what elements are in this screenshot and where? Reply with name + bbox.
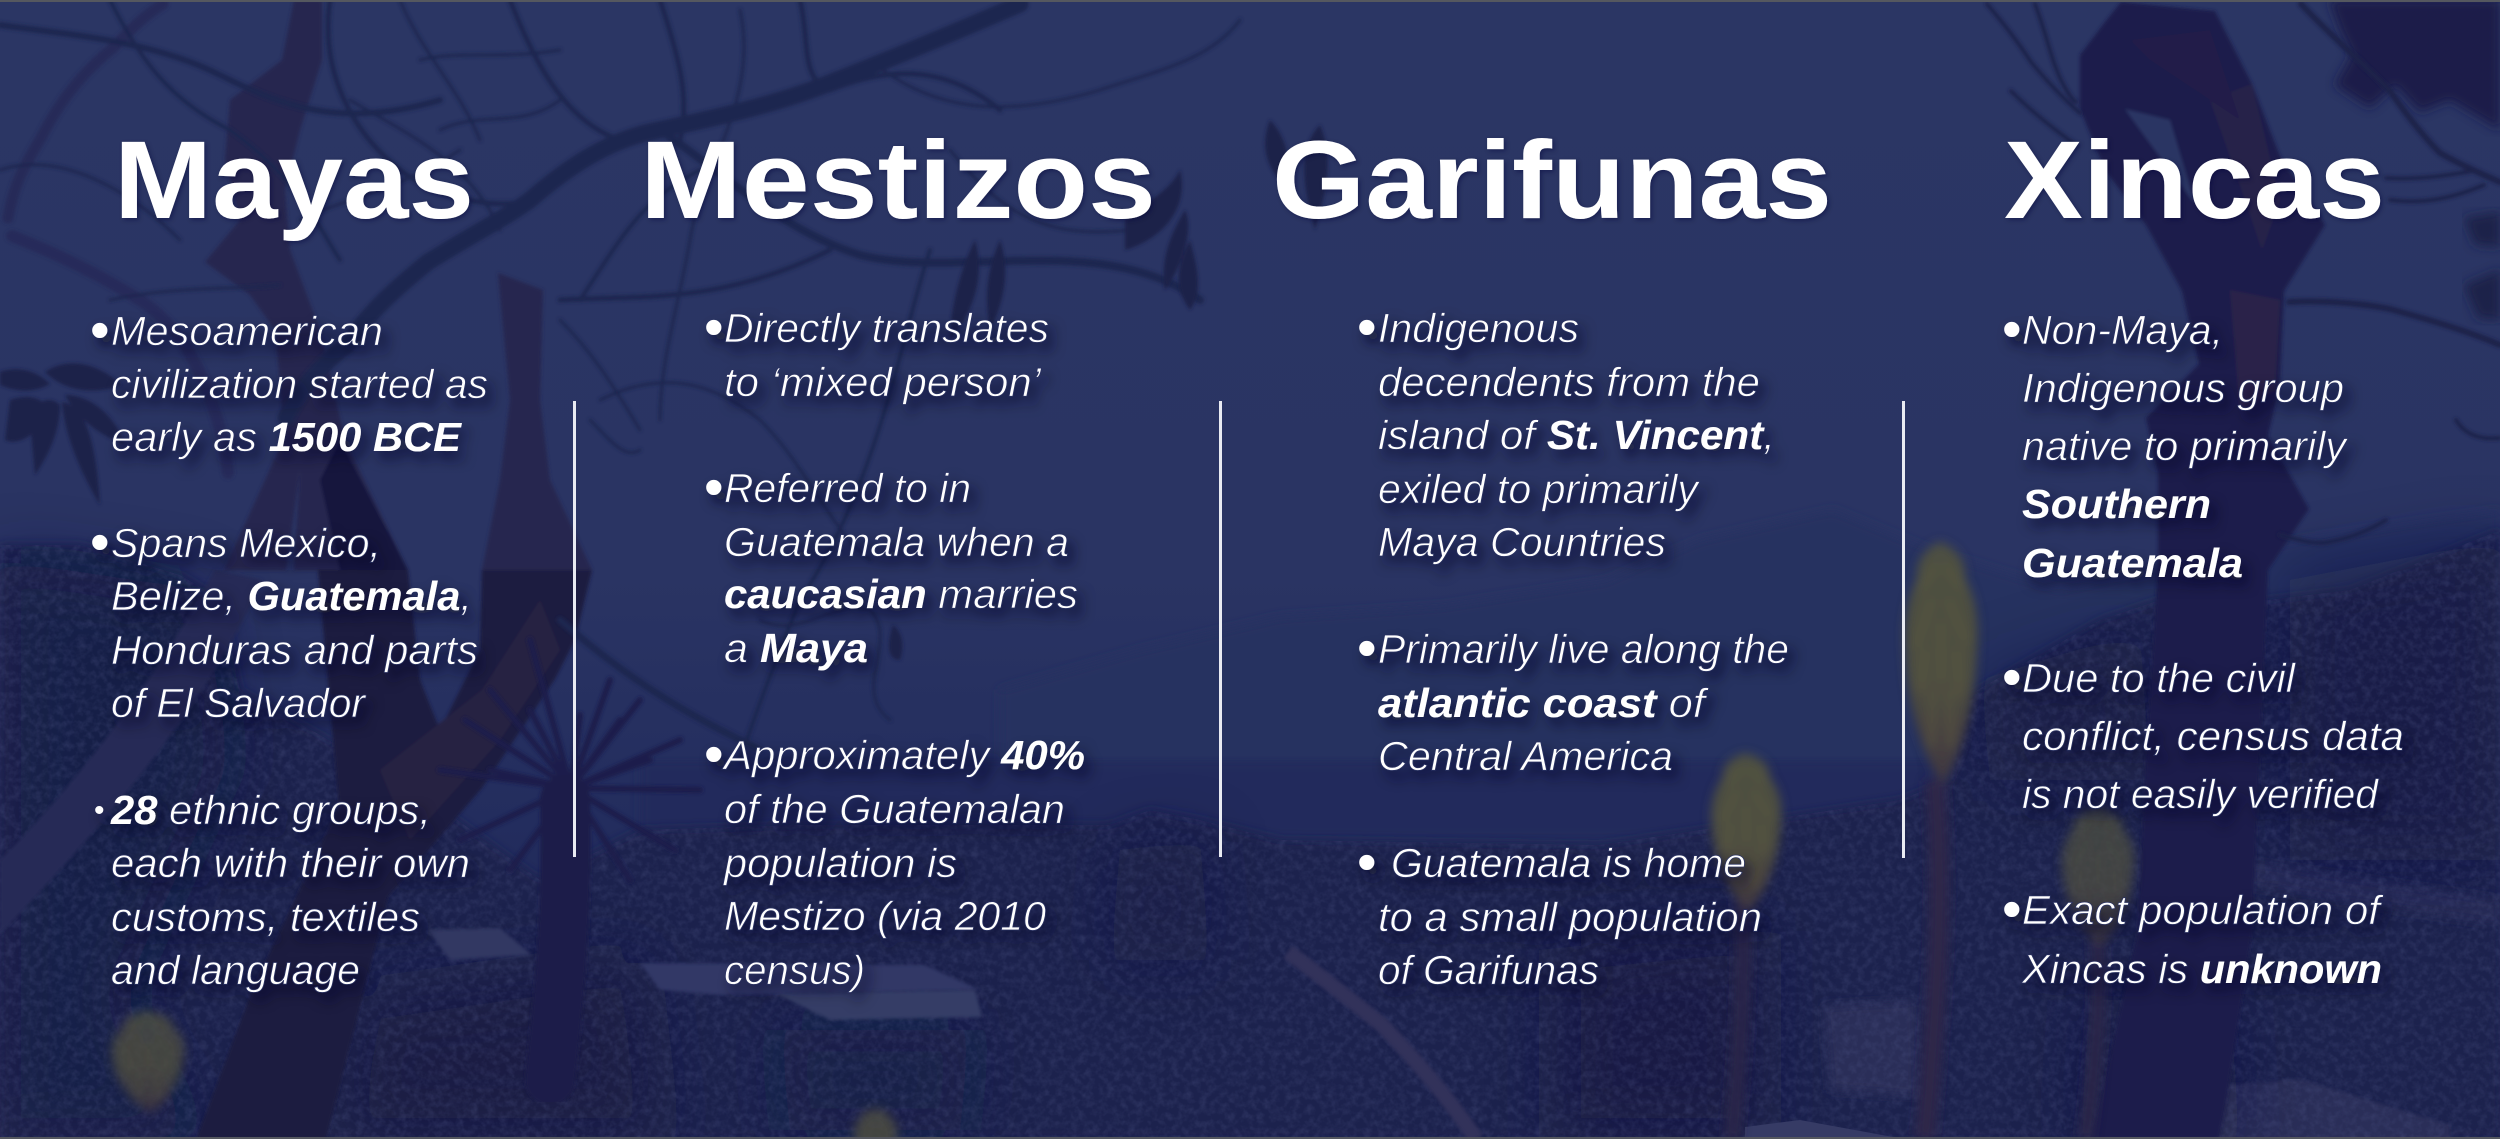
text block: Mayas facts: Mesoamerican	[111, 308, 383, 354]
text block: Mestizos facts	[704, 295, 1085, 993]
left trunks	[0, 0, 592, 1139]
text block: Mayas facts: early as 1500 BCE	[111, 414, 463, 460]
text block: Garifunas facts: Maya Countries	[1378, 519, 1666, 565]
text block: Xincas facts: conflict, census data	[2022, 713, 2404, 759]
panel: Mestizos	[640, 119, 1156, 993]
heading: Xincas: Xincas	[2004, 119, 2385, 242]
text block: Xincas facts: Non-Maya,	[2022, 307, 2223, 353]
text block: Mestizos facts: Referred to in	[724, 465, 971, 511]
panel: Mayas	[90, 119, 488, 993]
text block: Mayas facts: civilization started as	[111, 361, 488, 407]
text block: Xincas facts: Xincas is unknown	[2021, 946, 2382, 992]
text block: Mestizos facts: Guatemala when a	[724, 519, 1069, 565]
bare branches	[0, 0, 1240, 760]
large dark vegetation masses	[0, 540, 2500, 1139]
text block: Mayas facts: •	[90, 298, 110, 361]
text block: Mestizos facts: census)	[724, 947, 865, 993]
panel: Xincas	[2002, 119, 2404, 992]
text block: Xincas facts: Indigenous group	[2022, 365, 2344, 411]
text block: Mestizos facts: •	[704, 295, 724, 358]
text block: Xincas facts: •	[2002, 297, 2022, 360]
divider 1	[573, 401, 576, 857]
agave palm	[440, 640, 700, 1080]
dead branch	[1288, 952, 1476, 1139]
text block: Garifunas facts: Central America	[1378, 733, 1673, 779]
foliage grain	[0, 535, 2500, 1137]
text block: Xincas facts: Guatemala	[2022, 540, 2243, 586]
text block: Mestizos facts: of the Guatemalan	[724, 786, 1065, 832]
text block: Mayas facts: Honduras and parts	[111, 627, 478, 673]
panel: Garifunas	[1272, 119, 1832, 993]
heading: Mestizos: Mestizos	[640, 119, 1156, 242]
text block: Garifunas facts: decendents from the	[1378, 359, 1760, 405]
text block: Garifunas facts: of Garifunas	[1378, 947, 1599, 993]
text block: Mayas facts: 28 ethnic groups,	[110, 787, 431, 833]
text block: Xincas facts: Exact population of	[2022, 887, 2384, 933]
right trunk	[2080, 2, 2325, 1139]
text block: Garifunas facts: exiled to primarily	[1378, 466, 1700, 512]
text block: Mayas facts: each with their own	[111, 840, 470, 886]
text block: Mayas facts: Belize, Guatemala,	[111, 573, 472, 619]
text block: Xincas facts: •	[2002, 877, 2022, 940]
right branches and canopy	[1987, 0, 2500, 543]
text block: Garifunas facts: Guatemala is home	[1391, 840, 1746, 886]
text block: Garifunas facts: Primarily live along the	[1378, 626, 1789, 672]
text block: Mestizos facts: Approximately 40%	[721, 732, 1085, 778]
roofs	[428, 928, 532, 960]
text block: Mayas facts	[90, 298, 488, 993]
text block: Xincas facts: •	[2002, 645, 2022, 708]
text block: Mestizos facts: •	[704, 455, 724, 518]
text block: Garifunas facts	[1357, 295, 1789, 993]
text block: Garifunas facts: to a small population	[1378, 894, 1762, 940]
text block: Garifunas facts: island of St. Vincent,	[1378, 412, 1775, 458]
text block: Xincas facts: Due to the civil	[2022, 655, 2297, 701]
ground vegetation	[0, 530, 2500, 1139]
heading: Garifunas: Garifunas	[1272, 119, 1832, 242]
text block: Xincas facts	[2002, 297, 2404, 992]
text block: Garifunas facts: Indigenous	[1378, 305, 1579, 351]
text block: Mayas facts: customs, textiles	[111, 894, 420, 940]
heading: Mayas: Mayas	[114, 119, 474, 242]
text block: Mestizos facts: population is	[722, 840, 957, 886]
text block: Garifunas facts: atlantic coast of	[1378, 680, 1709, 726]
divider 2	[1219, 401, 1222, 857]
text block: Garifunas facts: •	[1357, 616, 1377, 679]
divider 3	[1902, 401, 1905, 858]
mountains	[1000, 510, 2500, 840]
text block: Mestizos facts: a Maya	[724, 625, 868, 671]
text block: Mestizos facts: Directly translates	[724, 305, 1049, 351]
text block: Xincas facts: Southern	[2022, 481, 2211, 527]
lawn and paths	[1823, 1000, 1918, 1097]
text block: Garifunas facts: •	[1357, 830, 1377, 893]
text block: Mayas facts: and language	[111, 947, 360, 993]
leaves	[0, 120, 1328, 660]
text block: Garifunas facts: •	[1357, 295, 1377, 358]
yellow torch flowers	[112, 542, 2135, 1139]
text block: Mayas facts: •	[94, 794, 105, 827]
text block: Xincas facts: native to primarily	[2022, 423, 2349, 469]
text block: Mestizos facts: Mestizo (via 2010	[724, 893, 1046, 939]
text block: Mestizos facts: •	[704, 722, 724, 785]
text block: Mestizos facts: caucasian marries	[724, 571, 1078, 617]
text block: Mayas facts: •	[90, 510, 110, 573]
text block: Xincas facts: is not easily verified	[2022, 771, 2379, 817]
text block: Mayas facts: of El Salvador	[111, 680, 367, 726]
text block: Mestizos facts: to ‘mixed person’	[724, 359, 1042, 405]
text block: Mayas facts: Spans Mexico,	[111, 520, 381, 566]
lake	[640, 760, 1940, 840]
